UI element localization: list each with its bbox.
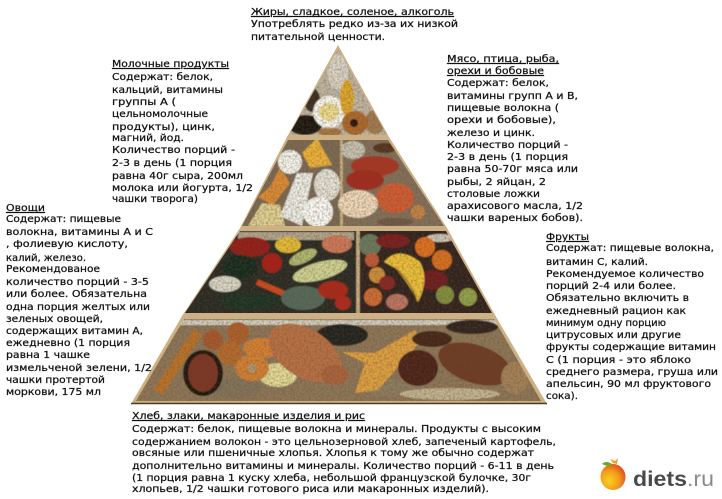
text: vegetables: ежедневно (1 порция — [6, 338, 130, 349]
text: fruit: цитрусовых или другие — [546, 330, 681, 341]
text: meat, poultry, fish, nuts and legumes: витамины групп А и В, — [447, 91, 578, 102]
text: fruit: Фрукты — [546, 232, 589, 243]
text: dairy — [112, 59, 253, 205]
text: dairy: цельномолочные — [112, 109, 208, 120]
tier: fats and sweets — [289, 50, 387, 135]
text: fats, sweets, salty, alcohol — [251, 7, 458, 43]
text: dairy: чашки творога) — [112, 194, 198, 205]
text: fruit: среднего размера, груша или — [546, 367, 718, 378]
text: dairy: 2-3 в день (1 порция — [112, 158, 232, 169]
text: vegetables: одна порция желтых или — [6, 302, 150, 313]
text: fats, sweets, salty, alcohol: Жиры, сладкое, соленое, алкоголь — [251, 7, 454, 18]
tier: meat and nuts — [338, 139, 448, 229]
text: dairy: магний, йод. — [112, 133, 184, 144]
text: fruit: фрукты содержащие витамин — [546, 342, 716, 353]
text: meat, poultry, fish, nuts and legumes: 2-3 в день (1 порция — [447, 152, 568, 163]
text: dairy: равна 40г сыра, 200мл — [112, 171, 243, 182]
text: fruit: сока). — [546, 391, 578, 402]
text: vegetables: измельченой зелени, 1/2 — [6, 363, 152, 374]
text: dairy: группы А ( — [112, 97, 176, 108]
text: dairy: кальций, витамины — [112, 85, 223, 96]
wordmark: diets.ru — [633, 468, 714, 491]
text: vegetables: или более. Обязательна — [6, 289, 147, 300]
text: bread, grains, pasta and rice: овсяные или пшеничные хлопья. Хлопья к тому же обычно содержат — [132, 448, 534, 459]
text: meat, poultry, fish, nuts and legumes: равна 50-70г мяса или — [447, 164, 578, 175]
text: fruit: Обязательно включить в — [546, 293, 689, 304]
icon: apple — [600, 458, 626, 490]
text: vegetables: калий, железо. — [6, 253, 86, 264]
text: vegetables: чашки протертой — [6, 375, 105, 386]
text: bread, grains, pasta and rice — [132, 411, 556, 495]
text: dairy: продукты), цинк, — [112, 122, 215, 133]
text: bread, grains, pasta and rice: дополнительно витамины и минералы. Количество порций - 6-11 в день — [132, 461, 554, 472]
text: vegetables: волокна, витамины А и С — [6, 227, 153, 238]
text: vegetables: зеленых овощей, — [6, 314, 103, 325]
text: dairy: Содержат: белок, — [112, 72, 213, 83]
text: fruit: С (1 порция - это яблоко — [546, 355, 691, 366]
logo: diets.ru — [600, 458, 714, 491]
text: meat, poultry, fish, nuts and legumes: арахисового масла, 1/2 — [447, 201, 583, 212]
text: meat, poultry, fish, nuts and legumes: столовые ложки — [447, 189, 540, 200]
text: meat, poultry, fish, nuts and legumes: Содержат: белок, — [447, 78, 549, 89]
text: vegetables: количество порций - 3-5 — [6, 277, 149, 288]
text: vegetables: содержащих витамин А, — [6, 326, 143, 337]
text: meat, poultry, fish, nuts and legumes: чашки вареных бобов). — [447, 213, 583, 224]
text: bread, grains, pasta and rice: Содержат: белок, пищевые волокна и минералы. Продукты с высоким — [132, 424, 541, 435]
pyramid base edge — [131, 402, 547, 404]
text: vegetables — [6, 203, 153, 398]
text: bread, grains, pasta and rice: хлопьев, 1/2 чашки готового риса или макаронных изделий). — [132, 484, 489, 495]
text: vegetables: моркови, 175 мл — [6, 387, 101, 398]
text: meat, poultry, fish, nuts and legumes: рыбы, 2 яйцан, 2 — [447, 177, 546, 188]
text: dairy: Количество порций - — [112, 145, 235, 156]
text: fruit: минимум одну порцию — [546, 318, 666, 329]
text: meat, poultry, fish, nuts and legumes: Мясо, птица, рыба, — [447, 54, 559, 65]
text: dairy: молока или йогурта, 1/2 — [112, 183, 253, 194]
tier: bread and grains — [136, 319, 541, 401]
text: bread, grains, pasta and rice: содержанием волокон - это цельнозерновой хлеб, запеченый картофель, — [132, 437, 556, 448]
text: meat, poultry, fish, nuts and legumes: Количество порций - — [447, 140, 568, 151]
text: vegetables: равна 1 чашке — [6, 350, 90, 361]
text: fruit: апельсин, 90 мл фруктового — [546, 379, 711, 390]
text: meat, poultry, fish, nuts and legumes: пищевые волокна ( — [447, 103, 559, 114]
text: bread, grains, pasta and rice: Хлеб, злаки, макаронные изделия и рис — [132, 411, 365, 422]
tier: dairy — [242, 140, 340, 226]
text: meat, poultry, fish, nuts and legumes: орехи и бобовые), — [447, 115, 556, 126]
text: dairy: Молочные продукты — [112, 59, 229, 70]
text: meat, poultry, fish, nuts and legumes: железо и цинк. — [447, 128, 535, 139]
text: fruit: ежедневный рацион как — [546, 306, 686, 317]
food pyramid — [130, 45, 550, 405]
pyramid frame — [131, 45, 547, 404]
tier: vegetables — [180, 230, 356, 315]
text: fats, sweets, salty, alcohol: Употреблять редко из-за их низкой — [251, 19, 458, 30]
text: meat, poultry, fish, nuts and legumes — [447, 54, 583, 224]
text: vegetables: , фолиевую кислоту, — [6, 239, 128, 250]
text: fruit: Содержат: пищевые волокна, — [546, 243, 714, 254]
text: fruit: витамин С, калий. — [546, 257, 648, 268]
text: vegetables: Овощи — [6, 203, 45, 214]
text: fats, sweets, salty, alcohol: питательной ценности. — [251, 32, 385, 43]
text: meat, poultry, fish, nuts and legumes: орехи и бобовые — [447, 66, 544, 77]
text: vegetables: Рекомендованое — [6, 264, 100, 275]
text: fruit — [546, 232, 718, 402]
texture overlay — [131, 45, 547, 405]
text: vegetables: Содержат: пищевые — [6, 214, 121, 225]
text: bread, grains, pasta and rice: (1 порция равна 1 куску хлеба, небольшой французской булочке, 30г — [132, 473, 531, 484]
text: fruit: порций 2-4 или более. — [546, 281, 676, 292]
tier: fruit — [359, 230, 500, 315]
text: fruit: Рекомендуемое количество — [546, 269, 704, 280]
